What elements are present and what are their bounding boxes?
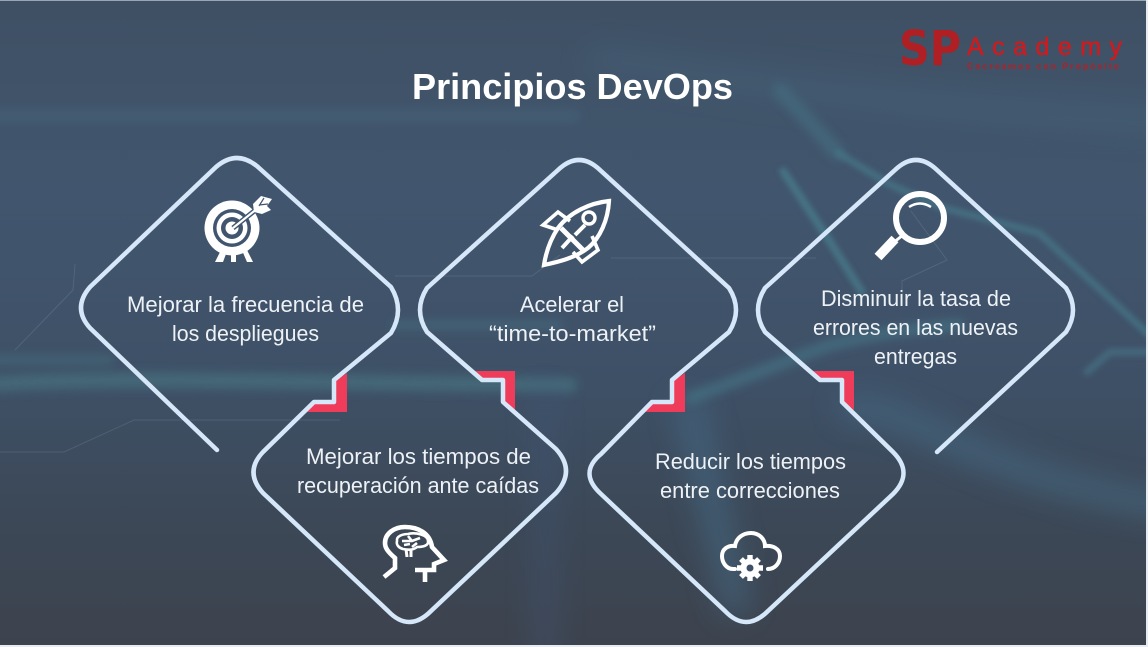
text: disminuir tasa de errores: Disminuir la tasa de: [821, 286, 1011, 311]
text: disminuir tasa de errores: [813, 286, 1018, 369]
text: mejorar tiempos de recuperacion: recuperación ante caídas: [297, 473, 539, 498]
logo: SP Academy: Cocreamos con Propósito: [967, 61, 1119, 71]
text: disminuir tasa de errores: errores en las nuevas: [813, 315, 1018, 340]
text: acelerar time-to-market: [489, 292, 656, 346]
icon: rocket: [543, 201, 609, 265]
text: reducir tiempos: Reducir los tiempos: [655, 449, 846, 474]
logo: SP Academy: [899, 21, 1122, 77]
text: reducir tiempos: entre correcciones: [660, 478, 840, 503]
text: mejorar tiempos de recuperacion: [297, 444, 539, 498]
text: reducir tiempos: [655, 449, 846, 503]
text: mejorar tiempos de recuperacion: Mejorar los tiempos de: [306, 444, 531, 469]
text: mejorar frecuencia: los despliegues: [172, 321, 319, 346]
text: disminuir tasa de errores: entregas: [874, 344, 957, 369]
logo: SP Academy: SP: [899, 21, 961, 77]
text: acelerar time-to-market: Acelerar el: [520, 292, 624, 317]
icon: target with arrow: [204, 196, 272, 262]
icon: head with brain: [384, 527, 444, 582]
icon: magnifying glass: [878, 194, 944, 257]
zigzag diamond outline: [81, 158, 1073, 622]
text: mejorar frecuencia: Mejorar la frecuencia de: [127, 292, 364, 317]
red corner accents: [307, 371, 854, 412]
text: acelerar time-to-market: “time-to-market”: [489, 321, 656, 346]
icon: cloud with gear: [722, 533, 780, 581]
text: mejorar frecuencia: [127, 292, 364, 346]
logo: SP Academy: Academy: [967, 33, 1122, 61]
title: Principios DevOps: [412, 66, 733, 107]
